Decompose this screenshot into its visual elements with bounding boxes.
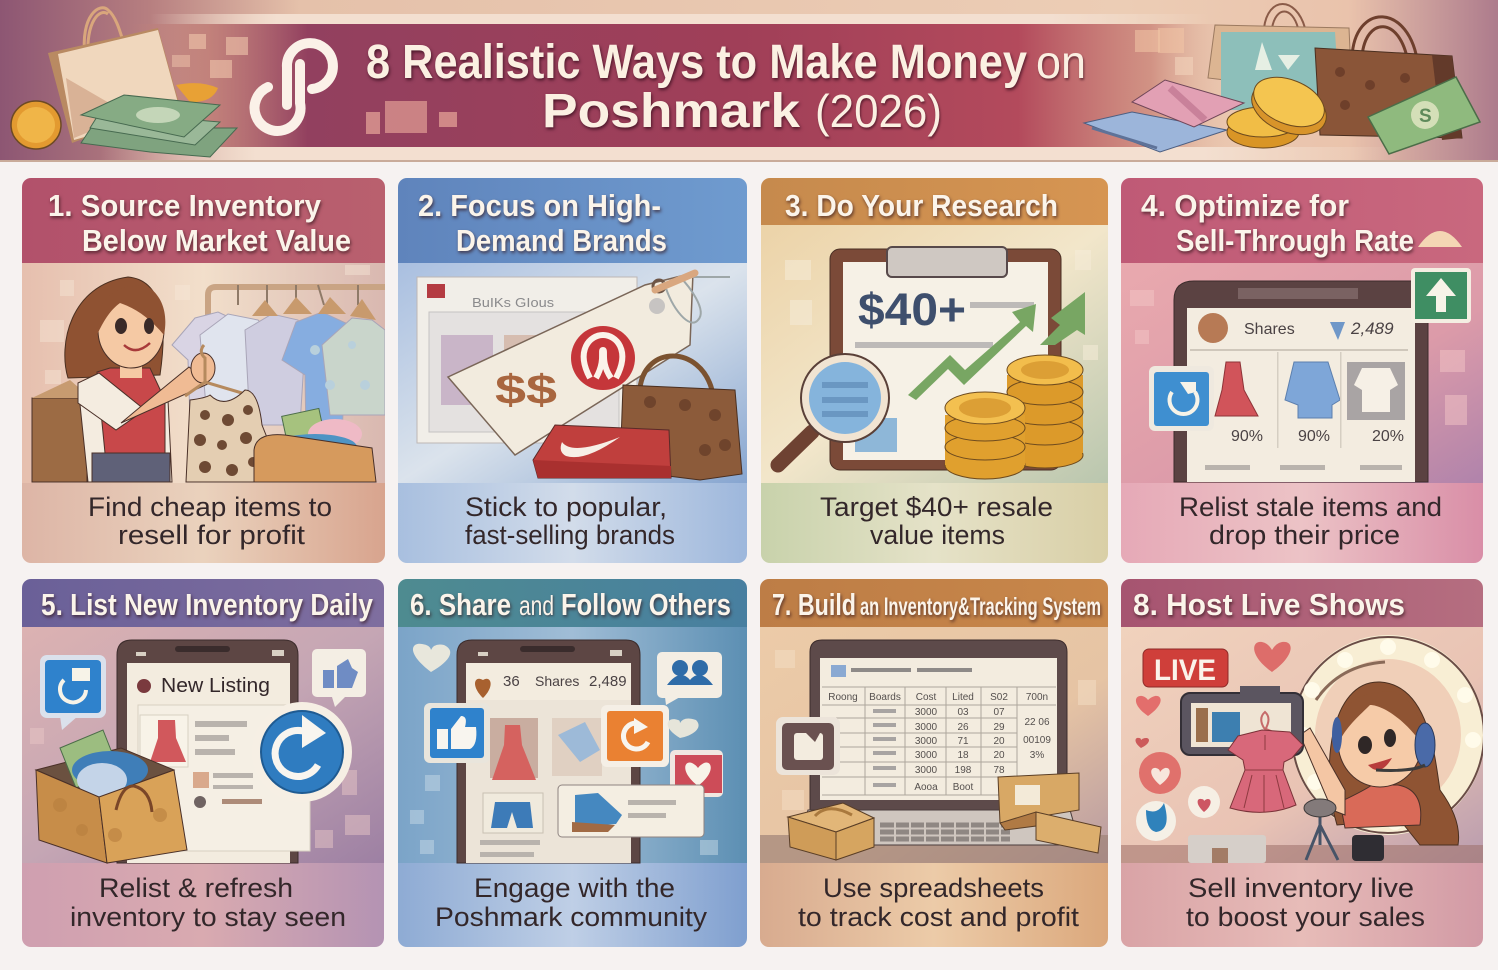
spreadsheet table: 3000 [915,722,938,733]
heading: 2. Focus on High- [418,188,661,223]
panel 2: high demand brands [398,178,747,563]
caption [88,492,332,550]
title banner [0,0,1498,162]
illustration: price tag [448,272,730,455]
spreadsheet table: 3000 [915,765,938,776]
icon: hearts [1136,642,1291,841]
illustration: browser window [417,277,637,443]
illustration: smartphone on gimbal [1181,686,1303,755]
heading [418,194,669,256]
heading: Below Market Value [82,223,351,258]
spreadsheet table: Aooa [914,782,938,793]
spreadsheet table: 3000 [915,750,938,761]
spreadsheet table: Lited [952,692,974,703]
illustration: phone with listing [117,640,310,863]
tablet header row: 2,489 [1350,319,1394,338]
icon: dollar bill: S [1419,106,1432,127]
spreadsheet table: 26 [957,722,969,733]
icon: brown designer bag [1315,17,1462,140]
heading: 6. Share [410,587,511,622]
caption [70,873,346,932]
illustration: phone feed [457,640,640,863]
caption: inventory to stay seen [70,902,346,932]
panel 7: tracking system [760,579,1108,947]
spreadsheet table: 198 [955,765,972,776]
illustration: coin stacks [945,355,1083,479]
caption: value items [870,520,1005,550]
caption [798,873,1080,932]
listing: blue shirt [1277,352,1340,448]
illustration: clothing rack [172,285,385,437]
panel 3: research [761,178,1108,563]
title text: Poshmark [542,85,800,138]
icon: dollar bill [1368,77,1480,154]
caption: Engage with the [474,873,675,903]
illustration: browser window: BuIKs GIous [472,295,555,310]
icon: gold bowl [176,83,218,102]
illustration: ring light [1292,637,1484,833]
heading: an Inventory&Tracking System [860,593,1101,621]
heading [772,587,1101,622]
spreadsheet table: 3000 [915,707,938,718]
illustration: designer handbag [620,356,742,480]
spreadsheet table: 22 06 [1024,717,1050,728]
icon: group bubble [657,652,722,705]
icon: folded pink towel [1132,80,1244,127]
panel 5: list daily [22,579,384,947]
caption: Stick to popular, [465,492,667,522]
heading: 8. Host Live Shows [1133,587,1405,622]
illustration: cardboard boxes [788,773,1101,860]
listing: red dress [1215,362,1263,445]
caption [1186,873,1425,932]
icon: teal shopping bag [1208,4,1352,110]
illustration: laptop spreadsheet [798,640,1080,845]
illustration: price tag: $$ [495,366,557,413]
illustration: money in cardboard bag [36,730,187,863]
illustration: grey parcel [1188,835,1266,863]
tablet header row [1190,313,1408,351]
icon: LIVE badge: LIVE [1154,654,1216,687]
icon: cash stack [81,95,237,157]
icon: inventory app tile [776,717,840,775]
listing: blue shirt: 90% [1298,428,1330,445]
title text: on [1036,36,1086,88]
caption: to boost your sales [1186,902,1425,932]
spreadsheet table: 71 [957,736,969,747]
spreadsheet table: 00109 [1023,735,1051,746]
spreadsheet table: Cost [916,692,937,703]
illustration: green growth arrow [908,292,1085,400]
caption [435,873,708,932]
icon: Poshmark logo [255,43,333,131]
spreadsheet table: 3000 [915,736,938,747]
icon: thumbs-up bubble [312,649,366,707]
spreadsheet table: 700n [1026,692,1048,703]
icon: heart bubble [668,719,699,738]
caption: Use spreadsheets [823,873,1044,903]
heading: Demand Brands [456,223,667,258]
panel 4: sell-through rate [1121,178,1483,563]
illustration: phone feed: Shares [535,673,579,689]
spreadsheet table: 20 [993,750,1005,761]
heading: 1. Source Inventory [48,188,322,223]
icon: orange refresh tile [601,705,669,767]
caption: fast-selling brands [465,520,675,550]
icon: gold coin [11,101,61,149]
icon: red heart tile [670,750,723,797]
panel 8: live shows [1121,579,1484,947]
listing: red dress: 90% [1231,428,1263,445]
icon: LIVE badge [1143,649,1228,687]
illustration: magnifying glass [778,354,889,465]
heading: Sell-Through Rate [1176,223,1414,258]
icon: blue refresh circle [252,702,352,802]
panel 1: source inventory [22,178,385,563]
caption [1179,492,1442,550]
heading: 5. List New Inventory Daily [41,587,374,622]
heading [410,587,731,622]
heading: 4. Optimize for [1141,188,1349,223]
spreadsheet table: 07 [993,707,1005,718]
heading [1141,188,1414,258]
spreadsheet table: 03 [957,707,969,718]
caption: Find cheap items to [88,492,332,522]
panel 6: community [398,579,747,947]
title text: (2026) [815,85,942,137]
illustration: tablet [1174,281,1428,482]
title text [366,36,1086,138]
illustration: host with headset [1300,682,1459,845]
spreadsheet table: Boot [953,782,974,793]
illustration: phone feed: 2,489 [589,673,627,690]
illustration: woman holding top [65,277,215,482]
illustration: clipboard [830,247,1061,470]
icon: folded blue towel [1084,112,1227,152]
title text: 8 Realistic Ways to Make Money [366,36,1027,89]
caption [820,496,1052,544]
icon: blue relist button [1149,366,1214,431]
listing: white tee [1340,352,1405,448]
illustration: cardboard box [32,380,87,482]
illustration: pink dress on hanger [1228,712,1303,812]
shirts on rack [172,312,385,437]
spreadsheet table: 18 [957,750,969,761]
spreadsheet table [822,687,1056,795]
illustration: tripod and camera [1304,799,1384,861]
heading: and [519,590,554,621]
heading: Follow Others [561,587,731,622]
caption: to track cost and profit [798,902,1080,932]
icon: cream triangle [1418,231,1462,247]
spreadsheet table: 3% [1030,750,1044,761]
heading: 7. Build [772,587,856,622]
spreadsheet table: S02 [990,692,1008,703]
spreadsheet table: 78 [993,765,1005,776]
caption: resell for profit [118,520,306,550]
illustration: basket with clothes [254,408,376,482]
icon: gold coins [1227,68,1334,148]
spreadsheet table: Boards [869,692,901,703]
caption: drop their price [1209,520,1400,550]
caption: Target $40+ resale [820,492,1053,522]
caption: Sell inventory live [1188,873,1414,903]
caption [465,492,675,550]
spreadsheet table: 20 [993,736,1005,747]
icon: blue relist tile [40,655,106,730]
illustration: red shoe box [533,425,671,478]
tablet header row: Shares [1244,321,1295,338]
icon: green up arrow [1411,268,1471,323]
illustration: leopard top on hanger [185,345,268,482]
caption: Relist stale items and [1179,492,1442,522]
icon: blue thumbs up [424,703,490,763]
card: shoes listing [558,785,704,837]
caption: Relist & refresh [99,873,293,903]
caption: Poshmark community [435,902,708,932]
heading [49,194,353,256]
spreadsheet table: Roong [828,692,858,703]
listing: white tee: 20% [1372,428,1404,445]
illustration: phone with listing: New Listing [161,675,270,697]
heading: 3. Do Your Research [785,188,1058,223]
illustration: phone feed: 36 [503,673,520,690]
icon: paper shopping bag [48,8,180,143]
illustration: clipboard: $40+ [858,284,966,335]
spreadsheet table: 29 [993,722,1005,733]
icon: white heart [413,644,450,672]
